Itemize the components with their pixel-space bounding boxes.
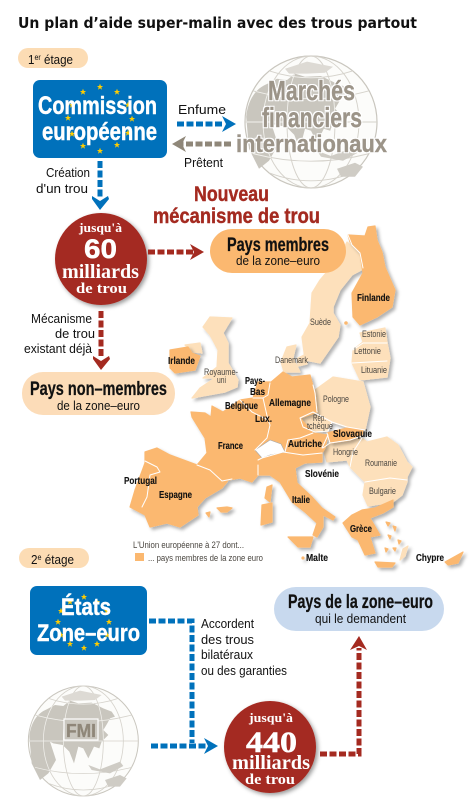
labels euro: Irlande: [168, 356, 195, 367]
globe: FMI: [28, 686, 138, 796]
arrow: mécanisme existant: de trou: [55, 326, 95, 341]
labels euro: Chypre: [416, 553, 444, 564]
panel: États Zone-euro: États: [61, 593, 111, 621]
circle: 440 milliards: [224, 701, 316, 793]
labels euro: Bas: [250, 387, 265, 398]
circle: 60 milliards: 60: [84, 234, 117, 264]
globe: marchés financiers: financiers: [262, 102, 362, 133]
panel: Commission européenne: européenne: [42, 118, 157, 146]
panel: Commission européenne: [33, 80, 167, 158]
labels non euro: tchèque: [307, 421, 333, 431]
globe: marchés financiers: internationaux: [236, 131, 388, 158]
arrow: Prêtent: [172, 136, 231, 170]
circle: 60 milliards: jusqu'à: [78, 220, 123, 235]
heading: nouveau mécanisme de trou: [153, 183, 320, 228]
arrow: mécanisme existant: Mécanisme: [31, 311, 92, 326]
euro countries: [130, 226, 463, 567]
arrow: vers pays membres: [148, 244, 204, 260]
panel: Commission européenne: Commission: [38, 92, 157, 120]
labels non euro: Pologne: [323, 394, 349, 404]
arrow: Enfume: Enfume: [178, 102, 226, 117]
labels euro: Malte: [306, 553, 328, 564]
circle: 60 milliards: de trou: [76, 281, 127, 297]
labels euro: Belgique: [225, 401, 258, 412]
badge: 1er étage: 1: [28, 52, 35, 67]
pill: pays non-membres: Pays non–membres: [30, 379, 167, 400]
arrow: Prêtent: Prêtent: [184, 155, 223, 170]
map of Europe: [124, 226, 463, 567]
pill: pays non-membres: [22, 372, 175, 415]
labels non euro: Lettonie: [354, 346, 381, 356]
arrow: FMI vers 440 milliards: [151, 738, 218, 754]
badge: 2e étage: e: [38, 553, 42, 562]
arrow: mécanisme existant: [24, 311, 110, 370]
circle: 440 milliards: milliards: [232, 752, 310, 774]
labels euro: Espagne: [159, 490, 192, 501]
labels euro: Grèce: [350, 524, 372, 535]
legend: ... pays membres de la zone euro: [148, 553, 263, 563]
globe: marchés financiers: Marchés: [268, 75, 355, 106]
labels non euro: Roumanie: [365, 458, 397, 468]
badge: 2e étage: 2: [31, 552, 38, 567]
badge: 2e étage: [19, 548, 89, 568]
arrow: mécanisme existant: existant déjà: [24, 341, 93, 356]
arrow: vers pays de la zone-euro: [320, 636, 367, 754]
arrow: création d'un trou: Création: [46, 165, 90, 180]
labels non euro: Royaume-: [204, 367, 238, 377]
labels euro: [124, 293, 444, 564]
labels euro: Italie: [292, 495, 310, 506]
legend: [133, 540, 263, 563]
title: Un plan d’aide super-malin avec des trous partout: [18, 14, 417, 32]
arrow: accordent: [149, 616, 287, 743]
arrow: accordent: bilatéraux: [201, 647, 253, 662]
labels non euro: [204, 317, 397, 496]
panel: États Zone-euro: [30, 586, 147, 655]
pill: pays de la zone-euro: [274, 587, 444, 631]
labels euro: Pays-: [245, 376, 265, 387]
heading: nouveau mécanisme de trou: mécanisme de trou: [153, 205, 320, 228]
labels non euro: uni: [217, 375, 226, 385]
labels non euro: Estonie: [362, 329, 386, 339]
labels euro: Autriche: [288, 439, 322, 450]
circle: 440 milliards: de trou: [245, 772, 295, 788]
panel: États Zone-euro: Zone–euro: [37, 620, 140, 647]
circle: 60 milliards: milliards: [62, 261, 139, 283]
labels euro: Allemagne: [269, 398, 311, 409]
labels non euro: Hongrie: [333, 447, 358, 457]
heading: nouveau mécanisme de trou: Nouveau: [194, 183, 269, 206]
pill: pays de la zone-euro: qui le demandent: [315, 611, 406, 626]
arrow: création d'un trou: [36, 161, 109, 210]
labels euro: Portugal: [124, 476, 157, 487]
non euro countries: [185, 242, 412, 560]
arrow: création d'un trou: d'un trou: [36, 181, 88, 196]
pill: pays membres: [210, 229, 346, 273]
legend: L'Union européenne à 27 dont...: [133, 540, 244, 550]
badge: 1er étage: er: [34, 53, 41, 62]
badge: 1er étage: [18, 48, 88, 68]
internal borders: [142, 235, 407, 507]
circle: 60 milliards: [55, 213, 147, 305]
labels non euro: Rép.: [313, 413, 326, 423]
circle: 440 milliards: 440: [246, 726, 297, 759]
globe: FMI: FMI: [66, 721, 96, 741]
Switzerland: [255, 440, 285, 458]
labels euro: Slovénie: [305, 469, 339, 480]
pill: pays membres: Pays membres: [227, 235, 329, 256]
labels non euro: Suède: [310, 317, 331, 327]
pill: pays membres: de la zone–euro: [236, 253, 320, 268]
circle: 440 milliards: jusqu'à: [248, 710, 294, 725]
arrow: Enfume: [177, 102, 236, 132]
badge: 1er étage: étage: [41, 52, 73, 67]
badge: 2e étage: étage: [42, 552, 74, 567]
labels euro: Lux.: [255, 414, 272, 425]
arrow: accordent: Accordent: [201, 616, 254, 631]
labels non euro: Bulgarie: [369, 486, 396, 496]
labels euro: Finlande: [357, 293, 390, 304]
labels euro: Slovaquie: [333, 429, 372, 440]
globe: marchés financiers: [236, 56, 388, 188]
pill: pays non-membres: de la zone–euro: [57, 398, 140, 413]
arrow: accordent: des trous: [201, 632, 254, 647]
labels euro: France: [218, 441, 243, 452]
labels non euro: Danemark: [275, 355, 308, 365]
labels non euro: Lituanie: [361, 365, 387, 375]
arrow: accordent: ou des garanties: [201, 663, 287, 678]
